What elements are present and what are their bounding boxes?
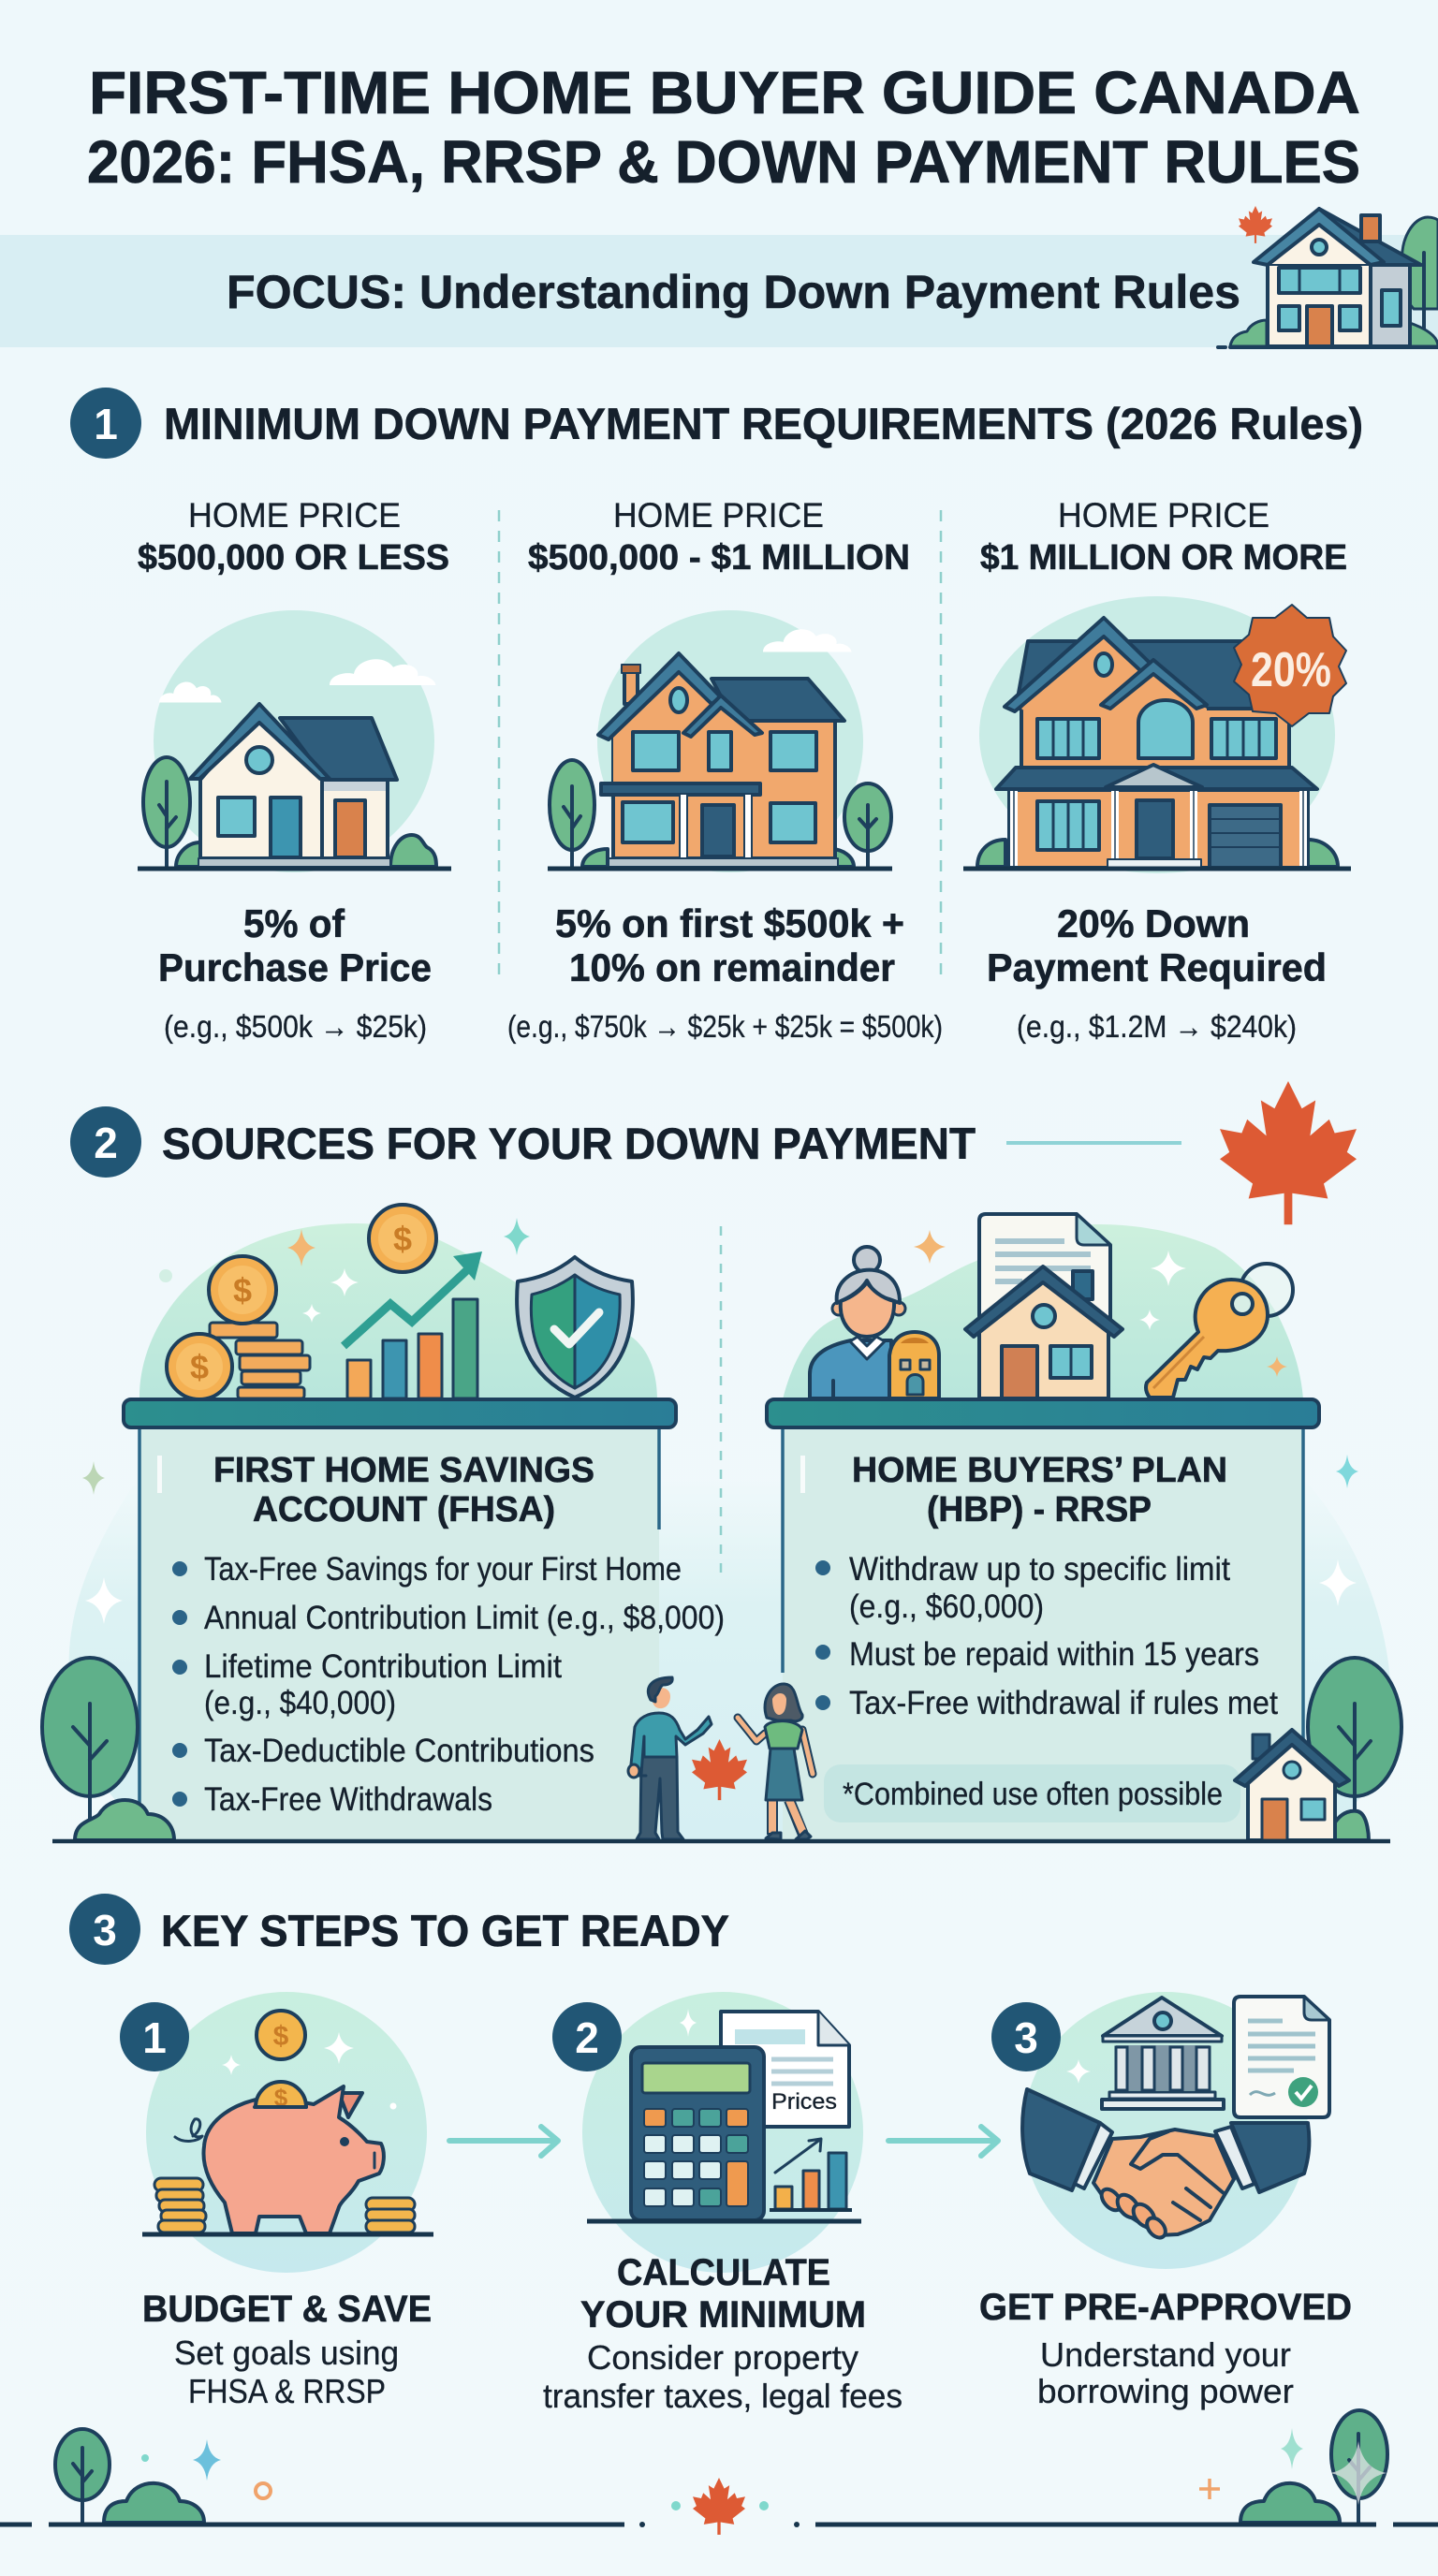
arrow: step 2 to 3 <box>888 2127 998 2156</box>
icon: small orange building <box>889 1332 939 1398</box>
combined use note <box>824 1764 1240 1822</box>
step 1 text: BUDGET & SAVE <box>142 2289 432 2330</box>
HBP bullet list: Must be repaid within 15 years <box>849 1636 1259 1673</box>
icon: tree right <box>1308 1658 1401 1841</box>
tier 3 price label: HOME PRICE <box>1058 496 1269 534</box>
column dividers <box>499 510 941 976</box>
step 1 text: Set goals using <box>174 2334 399 2372</box>
icon: coin stack <box>167 1205 436 1399</box>
FHSA bullet list: Tax-Free Savings for your First Home <box>204 1551 682 1588</box>
tier 2 price label <box>528 496 910 578</box>
icon: maple leaf <box>1220 1081 1357 1224</box>
icon: document <box>979 1214 1110 1329</box>
section 2 badge <box>70 1106 141 1178</box>
step 2 illustration: calculator and prices document <box>582 1992 863 2273</box>
icon: man <box>628 1677 712 1839</box>
step 3 text: GET PRE-APPROVED <box>979 2287 1352 2328</box>
icon: small house right <box>1235 1730 1349 1840</box>
panel title: FHSA: ACCOUNT (FHSA) <box>253 1490 555 1530</box>
HBP bullet list: Withdraw up to specific limit <box>849 1551 1230 1588</box>
focus banner: FOCUS: Understanding Down Payment Rules <box>227 266 1240 318</box>
tier 3 rule text: 20% Down <box>1057 901 1250 945</box>
icon: coin stack: $ <box>190 1348 209 1386</box>
tier 1 rule text: Purchase Price <box>158 945 432 989</box>
icon: key <box>1146 1264 1293 1398</box>
step 1 illustration: piggy bank <box>142 1992 433 2273</box>
section 3 heading: KEY STEPS TO GET READY <box>161 1906 729 1955</box>
icon: maple leaf between people <box>692 1739 747 1800</box>
panel: FHSA <box>124 1399 725 1840</box>
panel title: FHSA <box>213 1451 594 1530</box>
step 2 text: YOUR MINIMUM <box>580 2294 866 2335</box>
step 1 illustration: piggy bank: $ <box>273 2021 289 2052</box>
step 3 text: borrowing power <box>1037 2372 1294 2410</box>
arrow: step 1 to 2 <box>449 2127 558 2156</box>
step 1 illustration: piggy bank: $ <box>274 2084 288 2112</box>
step 3 text: Understand your <box>1040 2335 1291 2374</box>
step 2 text <box>543 2252 902 2415</box>
section 1 heading: MINIMUM DOWN PAYMENT REQUIREMENTS (2026 Rules) <box>164 399 1363 448</box>
section 2 heading: SOURCES FOR YOUR DOWN PAYMENT <box>162 1119 976 1168</box>
tier 2 rule text: (e.g., $750k → $25k + $25k = $500k) <box>507 1009 943 1044</box>
icon: shield with check <box>517 1257 633 1398</box>
icon: coin stack: $ <box>233 1271 252 1310</box>
step 2 number: 2 <box>575 2013 599 2062</box>
section 1 badge <box>70 388 141 459</box>
FHSA bullet list: Tax-Free Withdrawals <box>204 1781 492 1818</box>
tier 3 rule text: Payment Required <box>987 945 1327 989</box>
step 3 number <box>991 2002 1061 2071</box>
step 1 text: FHSA & RRSP <box>188 2372 386 2410</box>
icon: growth bars and arrow <box>344 1251 482 1398</box>
icon: coin stack: $ <box>393 1220 412 1258</box>
FHSA bullet list: Annual Contribution Limit (e.g., $8,000) <box>204 1600 725 1636</box>
hill behind HBP icons <box>783 1224 1303 1399</box>
combined use note: *Combined use often possible <box>843 1777 1223 1812</box>
tier 3 price label <box>980 496 1347 578</box>
tier 3 rule text <box>987 901 1327 1044</box>
icon: woman <box>738 1684 813 1839</box>
step 1 number: 1 <box>142 2013 167 2062</box>
title <box>87 59 1360 196</box>
panel title: HBP <box>852 1451 1227 1530</box>
icon: large house with 20 percent badge: 20% <box>1251 643 1331 697</box>
FHSA bullet list <box>172 1551 725 1818</box>
tier 2 price label: $500,000 - $1 MILLION <box>528 538 910 578</box>
step 3 number: 3 <box>1014 2013 1038 2062</box>
HBP bullet list: Tax-Free withdrawal if rules met <box>849 1685 1278 1721</box>
section 3 badge: 3 <box>93 1906 117 1954</box>
panel title: HBP: HOME BUYERS’ PLAN <box>852 1451 1227 1490</box>
ground line <box>52 1839 1390 1843</box>
title: 2026: FHSA, RRSP & DOWN PAYMENT RULES <box>87 128 1360 196</box>
tier 2 rule text: 5% on first $500k + <box>555 901 904 945</box>
icon: tree left <box>42 1658 174 1841</box>
step 1 number <box>120 2002 189 2071</box>
focus banner <box>0 235 1438 347</box>
icon: large house with 20 percent badge <box>963 596 1351 873</box>
step 2 text: transfer taxes, legal fees <box>543 2377 902 2415</box>
icon: house with maple leaf in banner <box>1218 206 1438 347</box>
section 2 badge: 2 <box>94 1119 118 1167</box>
title: FIRST-TIME HOME BUYER GUIDE CANADA <box>89 59 1360 126</box>
background blob behind panels <box>69 1479 1390 1840</box>
tier 1 price label: HOME PRICE <box>188 496 401 534</box>
tier 2 rule text: 10% on remainder <box>569 945 895 989</box>
tier 2 rule text <box>507 901 943 1044</box>
panel title: FHSA: FIRST HOME SAVINGS <box>213 1451 594 1490</box>
icon: medium house <box>548 610 892 872</box>
tier 1 price label: $500,000 OR LESS <box>138 538 449 578</box>
step 2 text: Consider property <box>587 2338 858 2377</box>
step 1 text <box>142 2289 432 2410</box>
tier 1 rule text: (e.g., $500k → $25k) <box>164 1009 427 1044</box>
FHSA bullet list: Tax-Deductible Contributions <box>204 1733 594 1769</box>
FHSA bullet list: Lifetime Contribution Limit <box>204 1648 562 1685</box>
section 3 badge <box>69 1894 140 1965</box>
sparkles <box>82 1218 1358 1624</box>
panel: HBP RRSP <box>767 1399 1319 1840</box>
tier 1 rule text: 5% of <box>243 901 345 945</box>
icon: grandmother <box>810 1247 905 1398</box>
step 2 illustration: calculator and prices document: Prices <box>771 2089 837 2115</box>
step 2 text: CALCULATE <box>617 2252 830 2293</box>
step 3 text <box>979 2287 1352 2410</box>
step 2 number <box>552 2002 622 2071</box>
tier 1 price label <box>138 496 449 578</box>
HBP bullet list: (e.g., $60,000) <box>849 1588 1044 1625</box>
HBP bullet list <box>815 1551 1278 1721</box>
tier 3 rule text: (e.g., $1.2M → $240k) <box>1017 1009 1297 1044</box>
icon: small house <box>138 610 451 872</box>
step 3 illustration: bank, document and handshake <box>1022 1992 1329 2269</box>
tier 1 rule text <box>158 901 432 1044</box>
tier 3 price label: $1 MILLION OR MORE <box>980 538 1347 578</box>
tier 2 price label: HOME PRICE <box>613 496 824 534</box>
panel title: HBP: (HBP) - RRSP <box>927 1490 1152 1530</box>
icon: house in HBP <box>965 1266 1123 1398</box>
FHSA bullet list: (e.g., $40,000) <box>204 1685 396 1721</box>
section 1 badge: 1 <box>94 400 118 448</box>
footer scenery <box>0 2410 1438 2535</box>
hill behind FHSA icons <box>139 1223 657 1399</box>
